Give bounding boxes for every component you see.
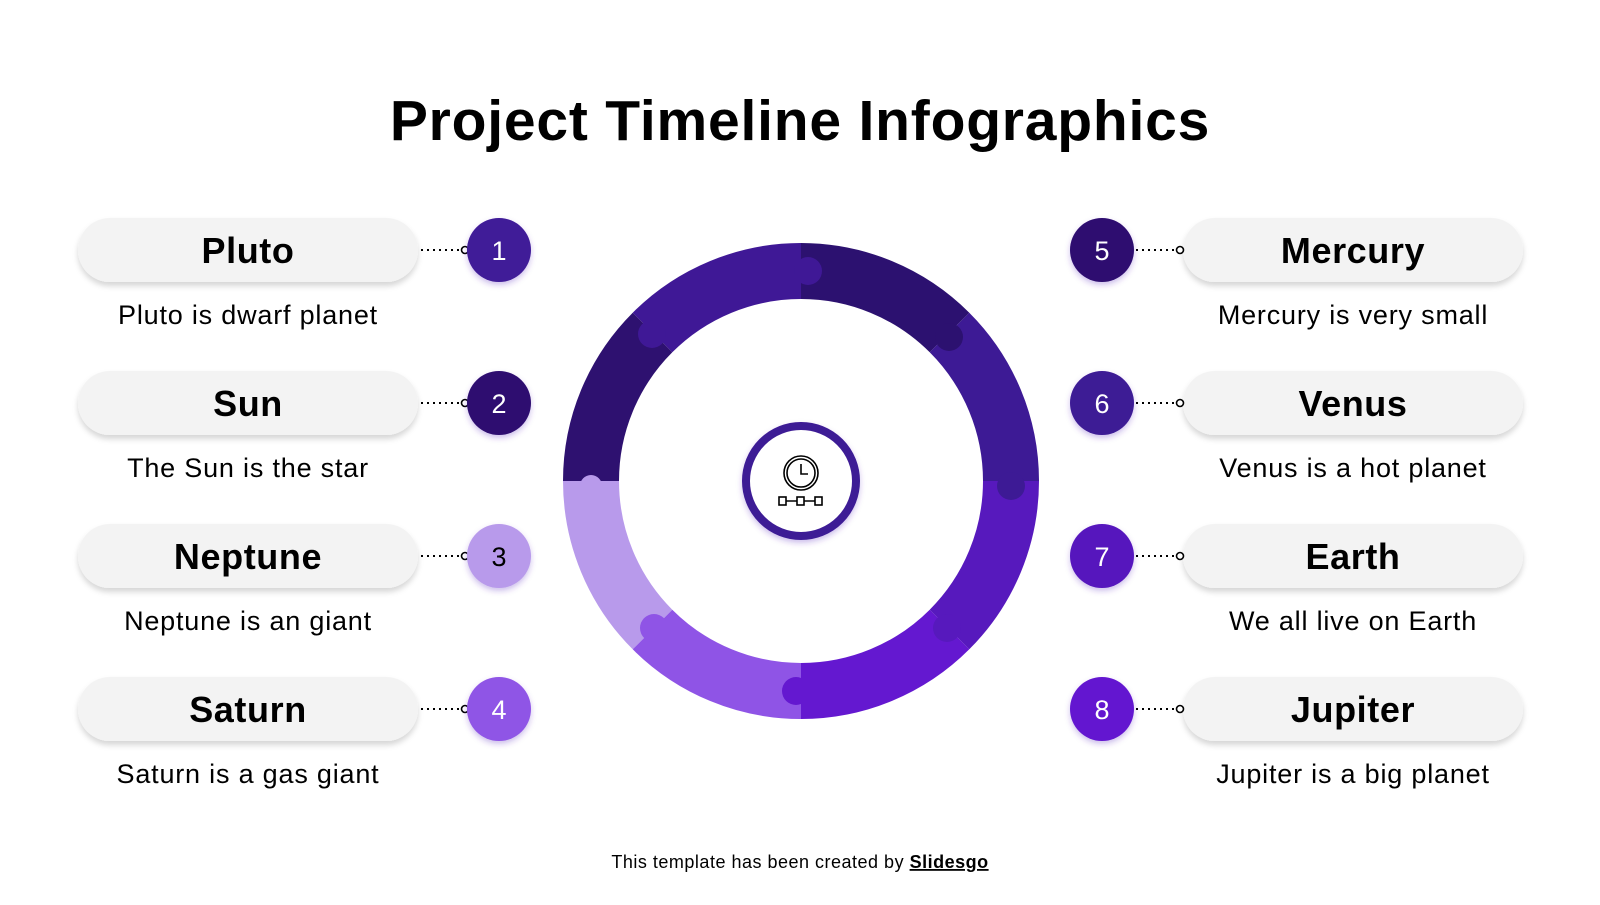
item 2: Sun: 2 xyxy=(491,389,507,419)
item 6: Venus: Venus xyxy=(1298,383,1408,424)
item 4: Saturn: 4 xyxy=(491,695,507,725)
item 7: Earth: Earth xyxy=(1305,536,1401,577)
item 2: Sun: Sun xyxy=(213,383,283,424)
item 1: Pluto: Pluto xyxy=(202,230,294,271)
item 4: Saturn: Saturn xyxy=(189,689,307,730)
title: Project Timeline Infographics xyxy=(390,89,1210,153)
icon: clock with process flow xyxy=(779,456,822,505)
center icon circle xyxy=(746,426,856,536)
item 4: Saturn xyxy=(78,677,531,789)
item 6: Venus: Venus is a hot planet xyxy=(1219,453,1487,483)
footer credit: This template has been created by Slidesgo xyxy=(611,852,989,872)
item 8: Jupiter xyxy=(1070,677,1523,789)
item 8: Jupiter: Jupiter xyxy=(1291,689,1415,730)
item 1: Pluto: 1 xyxy=(491,236,507,266)
item 8: Jupiter: 8 xyxy=(1094,695,1110,725)
item 8: Jupiter: Jupiter is a big planet xyxy=(1216,759,1490,789)
knobs xyxy=(580,257,1025,705)
item 3: Neptune: Neptune is an giant xyxy=(124,606,372,636)
right items xyxy=(1070,218,1523,789)
item 7: Earth xyxy=(1070,524,1523,636)
item 6: Venus xyxy=(1070,371,1523,483)
left items xyxy=(78,218,531,789)
item 5: Mercury: Mercury xyxy=(1281,230,1425,271)
item 5: Mercury: Mercury is very small xyxy=(1218,300,1488,330)
item 3: Neptune: Neptune xyxy=(174,536,322,577)
item 6: Venus: 6 xyxy=(1094,389,1110,419)
item 7: Earth: We all live on Earth xyxy=(1229,606,1477,636)
item 4: Saturn: Saturn is a gas giant xyxy=(117,759,379,789)
item 2: Sun xyxy=(78,371,531,483)
item 3: Neptune: 3 xyxy=(491,542,507,572)
item 2: Sun: The Sun is the star xyxy=(127,453,369,483)
item 5: Mercury xyxy=(1070,218,1523,330)
item 1: Pluto: Pluto is dwarf planet xyxy=(118,300,378,330)
item 7: Earth: 7 xyxy=(1094,542,1110,572)
item 1: Pluto xyxy=(78,218,531,330)
ring chart xyxy=(580,257,1025,705)
item 5: Mercury: 5 xyxy=(1094,236,1110,266)
item 3: Neptune xyxy=(78,524,531,636)
